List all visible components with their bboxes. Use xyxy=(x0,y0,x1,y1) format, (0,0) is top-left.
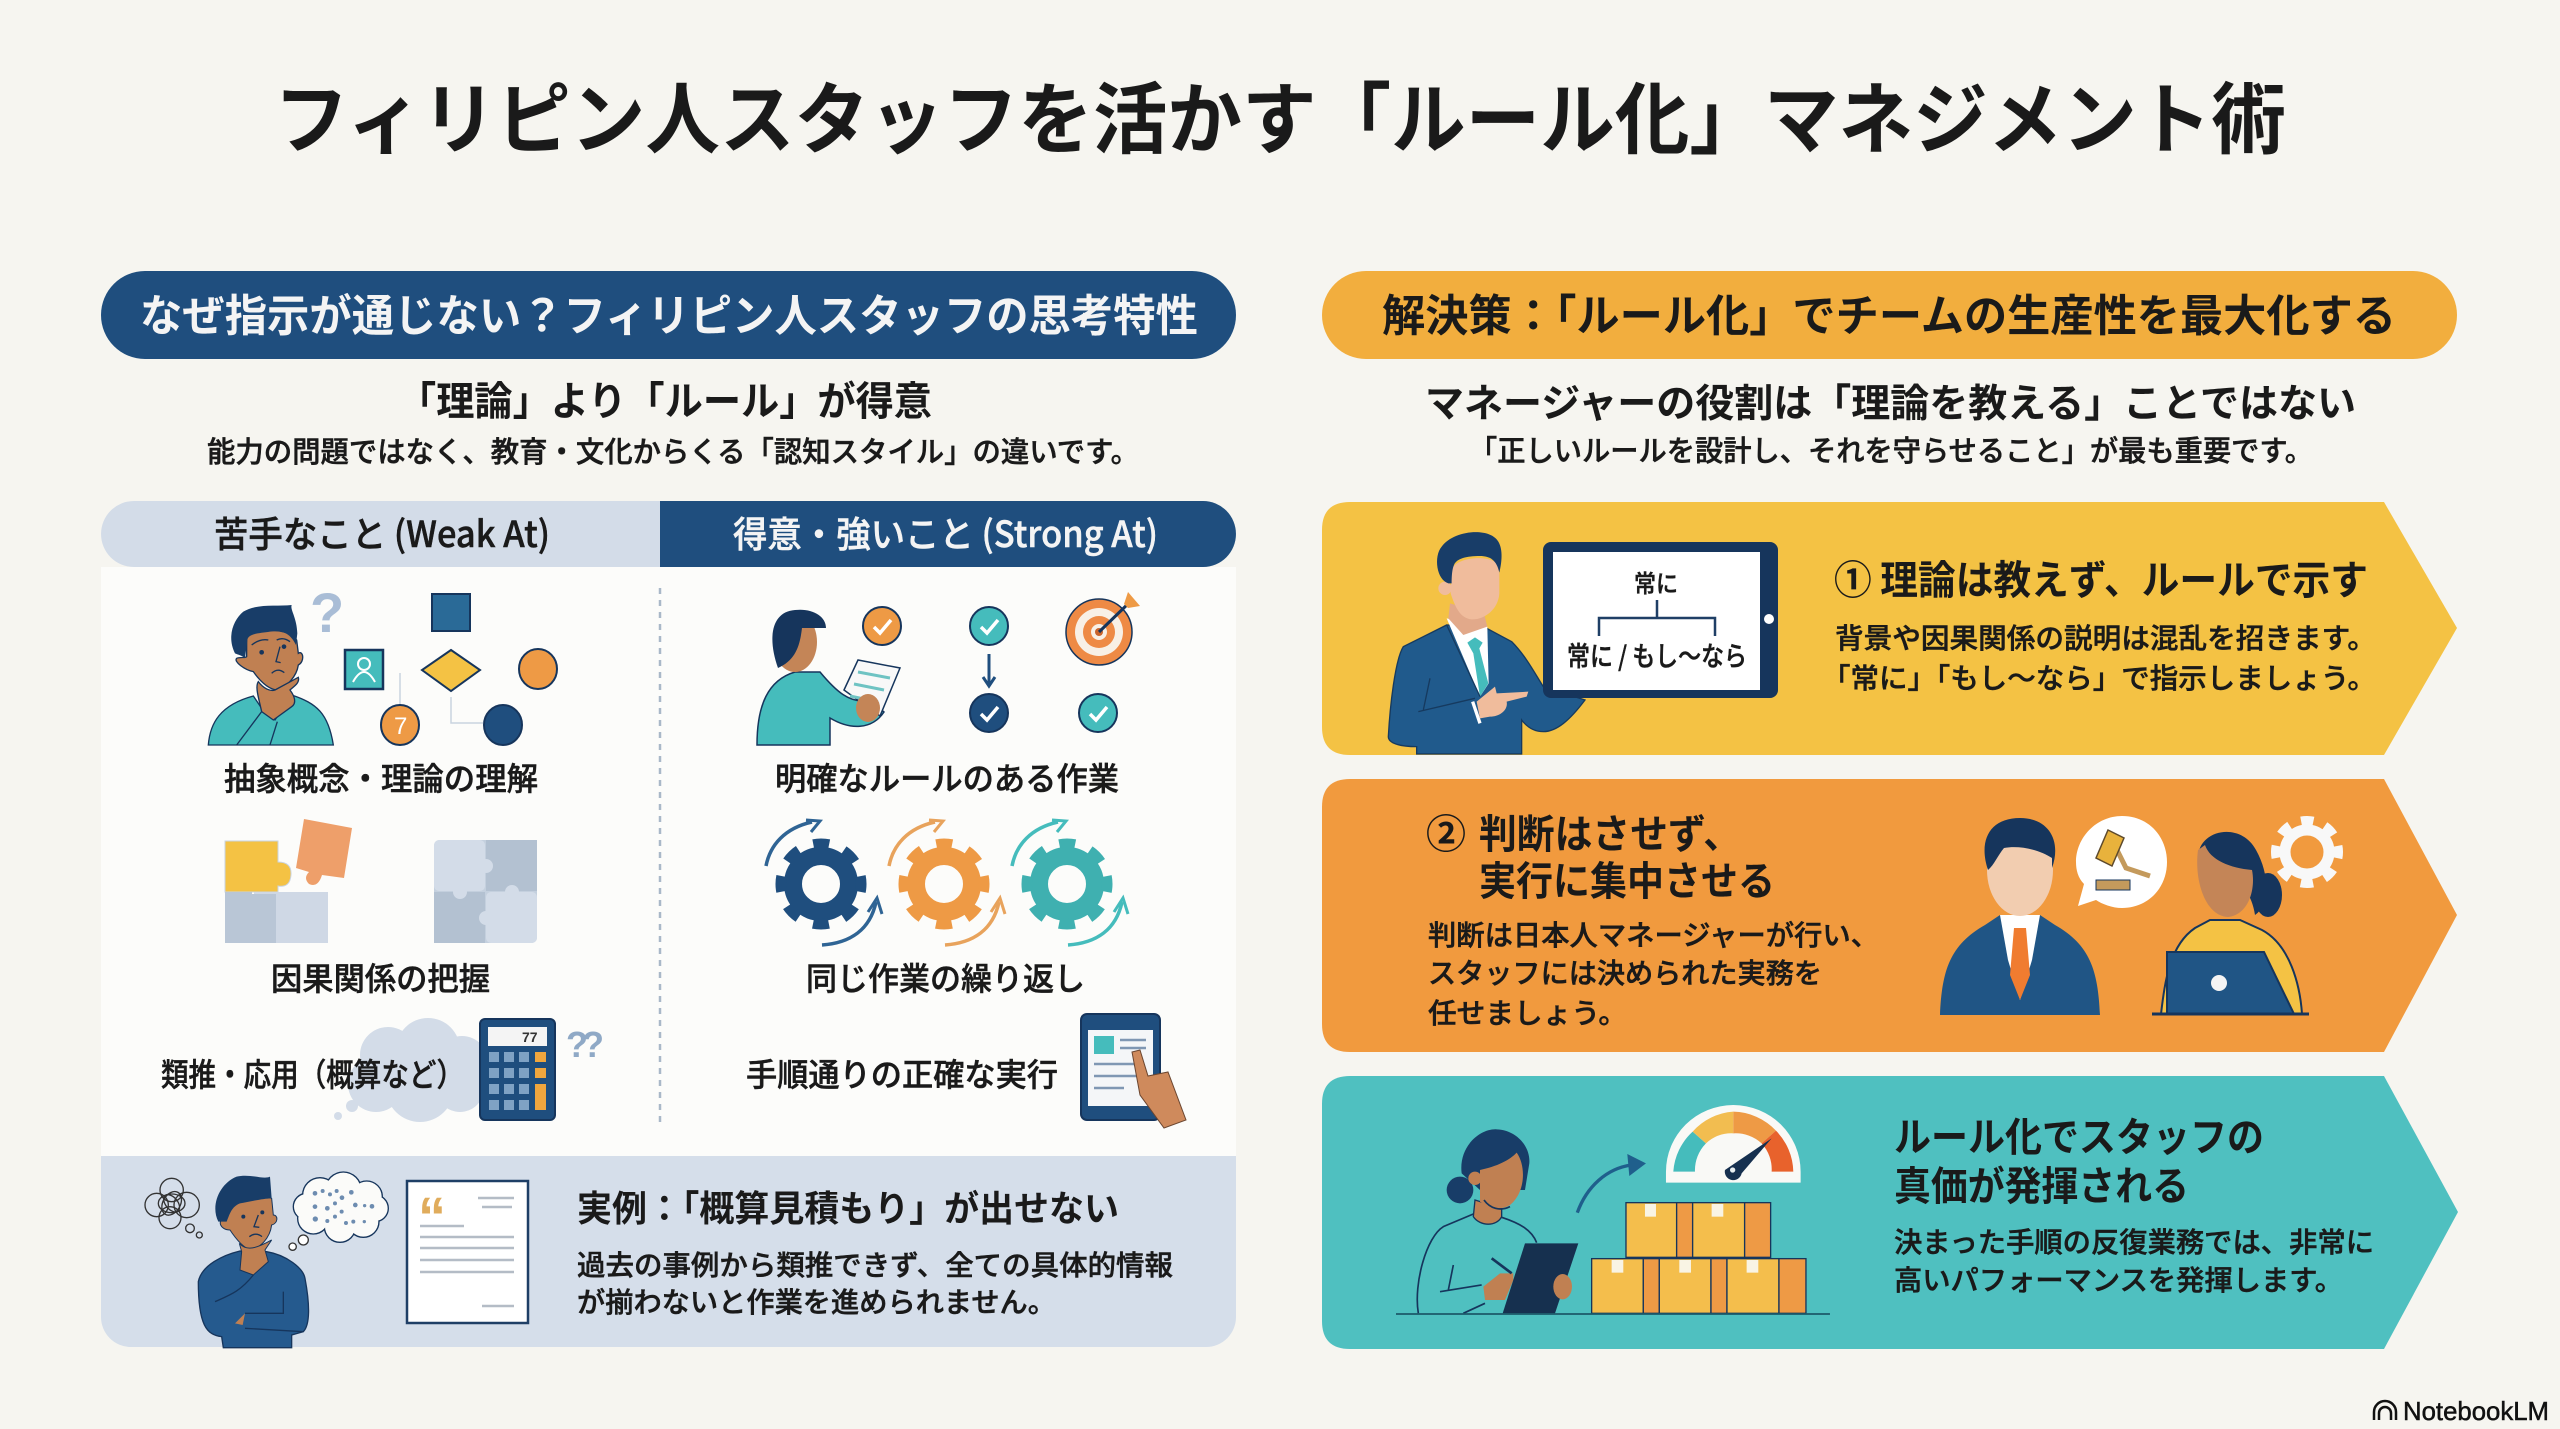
column header: strong at xyxy=(660,501,1236,567)
arrow: curved upward xyxy=(1577,1154,1646,1213)
banner 1: teach rules not theory xyxy=(1322,502,2457,755)
icon: document xyxy=(407,1181,528,1323)
icon: tablet with rule diagram: 常に / もし～なら xyxy=(1567,635,1747,674)
column header: weak at xyxy=(101,501,660,567)
banner 2 heading: ② xyxy=(1426,802,1466,860)
label: tasks with clear rules: 明確なルールのある作業 xyxy=(775,754,1119,800)
banner 2 body: 判断は日本人マネージャーが行い、 xyxy=(1428,914,1879,954)
banner 3 heading xyxy=(1894,1105,2264,1212)
label: analogy and application: 類推・応用（概算など） xyxy=(161,1050,464,1096)
label: cause and effect: 因果関係の把握 xyxy=(271,954,490,1000)
banner 2 heading: 判断はさせず、 xyxy=(1479,802,1741,860)
icon: calculator: 77 xyxy=(522,1029,538,1045)
callout body: 過去の事例から類推できず、全ての具体的情報 xyxy=(577,1244,1173,1284)
banner 3 body: 決まった手順の反復業務では、非常に xyxy=(1894,1221,2374,1261)
banner 2 heading xyxy=(1426,802,1775,907)
icon: tablet with rule diagram xyxy=(1543,542,1778,698)
banner 3 body xyxy=(1894,1221,2374,1299)
subtext: left: 能力の問題ではなく、教育・文化からくる「認知スタイル」の違いです。 xyxy=(207,429,1139,471)
comparison table xyxy=(101,501,1236,1348)
icon: check marks and target xyxy=(863,592,1140,732)
icon: tablet with rule diagram: 常に xyxy=(1634,564,1678,599)
banner 2 heading: 実行に集中させる xyxy=(1479,849,1775,907)
banner 2 body: 任せましょう。 xyxy=(1428,992,1627,1032)
heading pill: right: 解決策：「ルール化」でチームの生産性を最大化する xyxy=(1382,280,2396,344)
icon: Japanese manager xyxy=(1940,818,2100,1015)
icon: confused man with thought bubbles xyxy=(145,1173,388,1348)
icon: woman with clipboard xyxy=(1417,1129,1578,1313)
callout heading: 実例：「概算見積もり」が出せない xyxy=(577,1180,1119,1232)
banner 3 body: 高いパフォーマンスを発揮します。 xyxy=(1894,1259,2343,1299)
icon: stacked boxes xyxy=(1396,1203,1830,1314)
subheading: left: 「理論」より「ルール」が得意 xyxy=(398,369,932,427)
icon: thought cloud xyxy=(334,1018,488,1122)
heading pill: left: なぜ指示が通じない？フィリピン人スタッフの思考特性 xyxy=(140,280,1198,344)
column header: strong at: 得意・強いこと (Strong At) xyxy=(733,506,1158,558)
banner 1 body: 背景や因果関係の説明は混乱を招きます。 xyxy=(1835,617,2376,657)
banner 3 heading: ルール化でスタッフの xyxy=(1894,1105,2264,1163)
label: repeating same work: 同じ作業の繰り返し xyxy=(806,954,1085,1000)
subheading: right: マネージャーの役割は「理論を教える」ことではない xyxy=(1425,373,2356,429)
icon: tablet with pointing hand xyxy=(1081,1014,1186,1128)
column header: weak at: 苦手なこと (Weak At) xyxy=(214,506,550,558)
icon: flow diagram shapes xyxy=(345,594,557,745)
subtext: right: 「正しいルールを設計し、それを守らせること」が最も重要です。 xyxy=(1469,428,2313,470)
icon: person reading checklist xyxy=(757,610,900,745)
icon: speech bubble with gavel xyxy=(2076,816,2167,908)
icon: white gear xyxy=(2271,816,2343,888)
icon: document: “ xyxy=(418,1185,446,1248)
callout: real example xyxy=(101,1156,1236,1348)
icon: manager pointing xyxy=(1388,532,1585,754)
banner 1 body xyxy=(1822,617,2376,697)
label: abstract concepts: 抽象概念・理論の理解 xyxy=(224,754,538,800)
icon: thinking man xyxy=(208,605,333,745)
banner 3 heading: 真価が発揮される xyxy=(1894,1154,2189,1212)
banner 1 body: 「常に」「もし～なら」で指示しましょう。 xyxy=(1822,657,2376,697)
icon: question mark: ? xyxy=(310,581,344,644)
banner 2 body xyxy=(1428,914,1879,1032)
banner 2 body: スタッフには決められた実務を xyxy=(1428,952,1822,992)
title: フィリピン人スタッフを活かす「ルール化」マネジメント術 xyxy=(274,58,2286,170)
banner 3: true value of staff xyxy=(1322,1076,2458,1349)
banner 2: no judgement, focus on execution xyxy=(1322,779,2457,1052)
icon: performance gauge xyxy=(1666,1105,1801,1183)
logo: NotebookLM: NotebookLM xyxy=(2403,1396,2549,1426)
icon: question marks: ?? xyxy=(566,1024,604,1065)
panel: left column, why instructions fail xyxy=(101,271,1236,1348)
banner 1 heading: ① 理論は教えず、ルールで示す xyxy=(1834,548,2368,606)
heading pill: right xyxy=(1322,271,2457,359)
callout body xyxy=(577,1244,1173,1321)
callout body: が揃わないと作業を進められません。 xyxy=(577,1281,1056,1321)
icon: complete puzzle xyxy=(434,840,537,943)
label: accurate execution: 手順通りの正確な実行 xyxy=(746,1050,1058,1096)
icon: flow diagram shapes: 7 xyxy=(394,713,407,740)
panel: right column, solution xyxy=(1322,271,2458,1349)
icon: staff with laptop xyxy=(2152,832,2309,1014)
icon: broken puzzle xyxy=(225,819,352,943)
icon: calculator xyxy=(480,1019,555,1120)
icon: repeating gears xyxy=(766,820,1128,945)
